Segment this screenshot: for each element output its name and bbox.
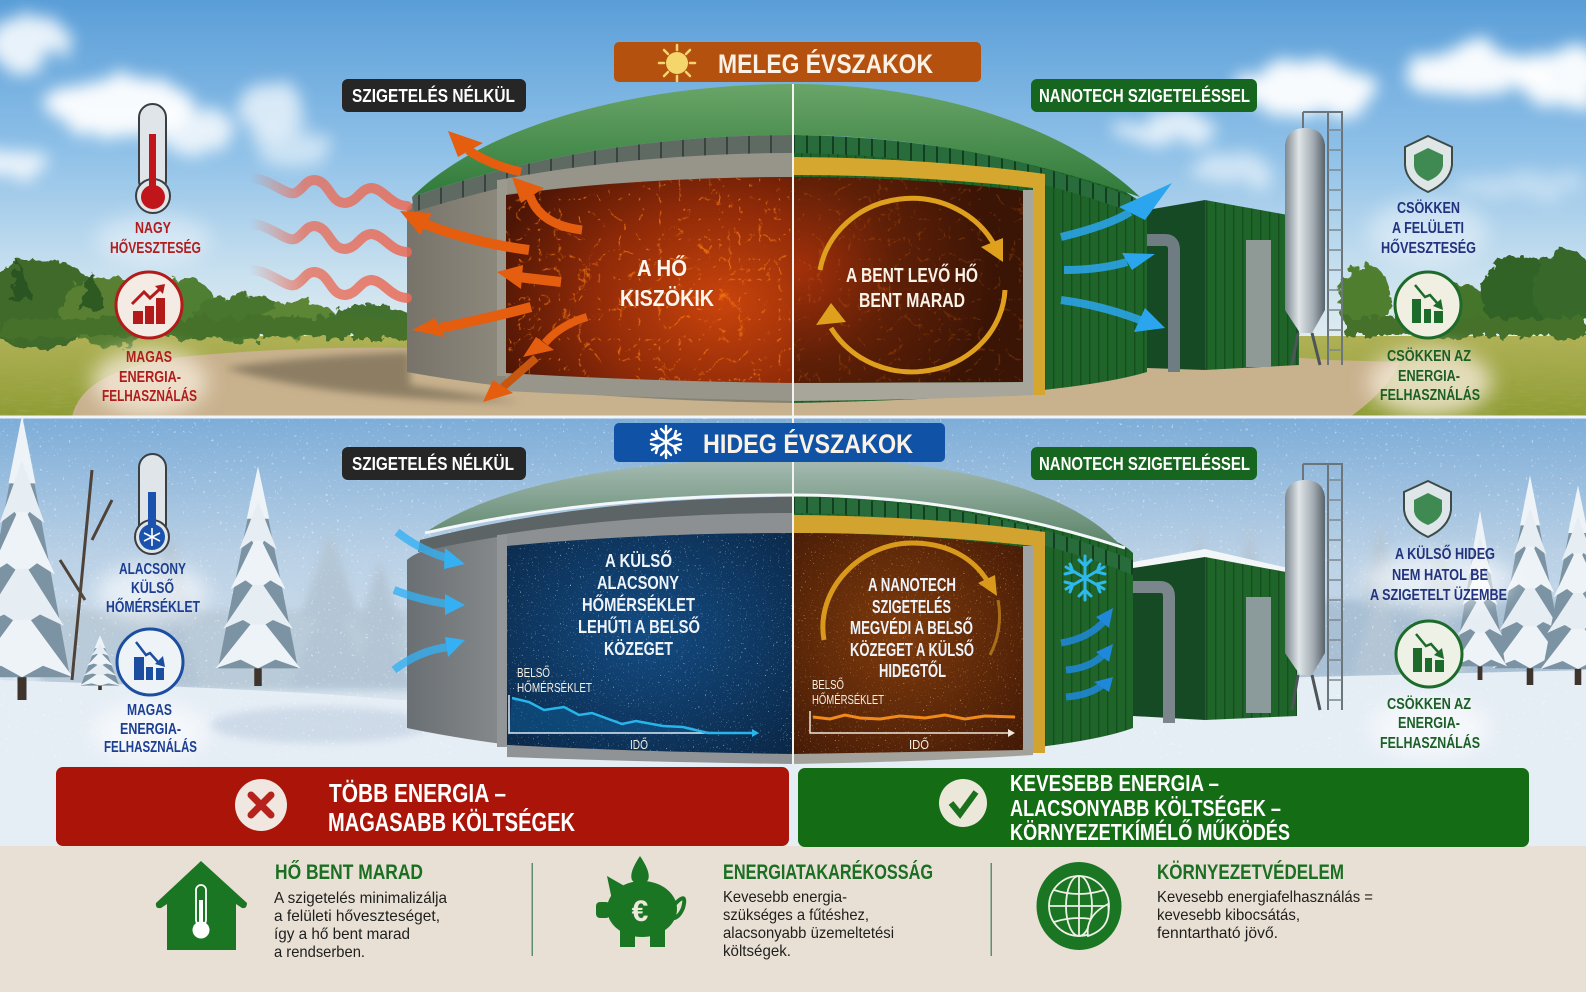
yellow insulation frame bbox=[793, 157, 1045, 395]
badge: without insulation summer bbox=[342, 79, 526, 112]
badge: nanotech summer bbox=[1031, 79, 1257, 112]
callout: more energy: TÖBB ENERGIA – bbox=[329, 778, 506, 808]
icon: thermometer cold bbox=[135, 454, 169, 554]
text: energy use reduced winter: ENERGIA- bbox=[1398, 715, 1460, 732]
text: energy saving: ENERGIATAKARÉKOSSÁG bbox=[723, 859, 933, 884]
callout: more energy bbox=[56, 767, 789, 846]
cutaway: retained heat right bbox=[793, 170, 1028, 390]
concrete bottom bbox=[506, 373, 793, 401]
concrete seam bbox=[497, 180, 507, 376]
icon: rising energy chart bbox=[116, 272, 182, 338]
text: surface heat loss reduced bbox=[1381, 198, 1476, 257]
text: heat escapes: A HŐ bbox=[637, 254, 687, 281]
text: heat stays inside bbox=[846, 264, 978, 312]
icon: shield bbox=[1405, 136, 1452, 192]
concrete wall uninsulated bbox=[407, 135, 793, 403]
text: energy use reduced winter bbox=[1380, 694, 1480, 752]
text: nanotech protects interior: HIDEGTŐL bbox=[879, 660, 946, 681]
green building winter bbox=[1133, 549, 1297, 723]
text: energy use reduced summer: CSÖKKEN AZ bbox=[1387, 346, 1471, 365]
text: low outside temperature cools interior bbox=[578, 550, 700, 659]
text: energy use reduced winter: CSÖKKEN AZ bbox=[1387, 694, 1471, 713]
text: heat stays in: HŐ BENT MARAD bbox=[275, 859, 423, 884]
badge: without insulation summer: SZIGETELÉS NÉLKÜL bbox=[352, 85, 515, 106]
winter sky bbox=[0, 418, 1586, 718]
badge: without insulation winter bbox=[342, 447, 526, 480]
heading: cold seasons: HIDEG ÉVSZAKOK bbox=[703, 428, 913, 459]
rim left bbox=[418, 497, 793, 552]
text: energy use reduced summer: FELHASZNÁLÁS bbox=[1380, 385, 1480, 404]
text: heat stays in: a rendserben. bbox=[274, 944, 365, 961]
text: heat stays inside: BENT MARAD bbox=[859, 290, 965, 312]
text: heat stays inside: A BENT LEVŐ HŐ bbox=[846, 264, 978, 287]
cutaway: hot interior left bbox=[500, 170, 795, 390]
pine trees left bbox=[0, 415, 300, 700]
text: heat stays in bbox=[274, 859, 447, 961]
heading: cold seasons bbox=[614, 423, 945, 462]
label glow left bbox=[92, 198, 1492, 416]
divider bbox=[990, 863, 992, 956]
snow on rim bbox=[425, 495, 1125, 548]
green building bbox=[1147, 200, 1299, 372]
text: low outside temperature cools interior: A KÜLSŐ bbox=[605, 550, 672, 571]
text: environmental protection: fenntartható jövő. bbox=[1157, 925, 1278, 942]
text: high energy use: ENERGIA- bbox=[119, 369, 181, 386]
text: surface heat loss reduced: A FELÜLETI bbox=[1392, 218, 1464, 237]
door bbox=[1246, 240, 1271, 367]
text: high energy use winter bbox=[104, 702, 197, 756]
callout: less energy: KÖRNYEZETKÍMÉLŐ MŰKÖDÉS bbox=[1010, 818, 1290, 845]
text: environmental protection: KÖRNYEZETVÉDELEM bbox=[1157, 859, 1344, 884]
text: high heat loss: NAGY bbox=[135, 220, 171, 237]
text: low outside temperature bbox=[106, 561, 200, 616]
text: cold does not reach plant: NEM HATOL BE bbox=[1392, 567, 1488, 584]
text: high heat loss: HŐVESZTESÉG bbox=[110, 238, 201, 257]
arc arrow: protected interior bbox=[823, 543, 1000, 655]
callout: less energy: ALACSONYABB KÖLTSÉGEK – bbox=[1010, 794, 1281, 821]
icon: falling energy chart green bbox=[1395, 272, 1461, 338]
grey strip bbox=[1023, 546, 1033, 751]
chart: falling internal temperature bbox=[509, 665, 759, 752]
ladder cage bbox=[1303, 112, 1342, 365]
bottom strip right bbox=[793, 382, 1033, 401]
text: energy saving: Kevesebb energia- bbox=[723, 889, 847, 906]
digester tank (winter) bbox=[407, 458, 1133, 764]
callout: more energy: MAGASABB KÖLTSÉGEK bbox=[328, 807, 575, 837]
pipe bbox=[1147, 240, 1174, 372]
text: nanotech protects interior: MEGVÉDI A BELSŐ bbox=[850, 617, 973, 638]
heading: warm seasons bbox=[614, 42, 981, 82]
text: heat stays in: A szigetelés minimalizálja bbox=[274, 890, 447, 907]
snowfall bbox=[0, 418, 1586, 758]
chart: falling internal temperature: BELSŐ bbox=[517, 665, 550, 680]
text: nanotech protects interior bbox=[850, 574, 974, 681]
text: low outside temperature cools interior: LEHŰTI A BELSŐ bbox=[578, 616, 700, 637]
text: high energy use winter: ENERGIA- bbox=[120, 721, 181, 738]
grass field bbox=[0, 336, 1586, 417]
yellow insulation frame bbox=[793, 515, 1045, 753]
text: cold does not reach plant: A KÜLSŐ HIDEG bbox=[1395, 544, 1495, 563]
dome rim right bbox=[793, 135, 1147, 218]
text: energy use reduced winter: FELHASZNÁLÁS bbox=[1380, 733, 1480, 752]
divider bbox=[532, 863, 533, 956]
dirt ground bbox=[72, 348, 1400, 417]
icon: check bbox=[939, 779, 987, 827]
text: cold does not reach plant: A SZIGETELT ÜZEMBE bbox=[1370, 585, 1507, 604]
panel: cold seasons scene bbox=[0, 415, 1586, 848]
arrows: cold entering bbox=[394, 532, 465, 670]
chart: stable internal temperature bbox=[810, 677, 1015, 752]
arrows: heat escaping bbox=[400, 131, 587, 402]
chart: falling internal temperature: IDŐ bbox=[630, 737, 648, 752]
text: heat escapes bbox=[620, 254, 714, 311]
concrete ring bbox=[498, 153, 793, 195]
text: high energy use: FELHASZNÁLÁS bbox=[102, 386, 197, 405]
text: environmental protection: kevesebb kibocsátás, bbox=[1157, 907, 1300, 924]
rim right bbox=[793, 497, 1133, 575]
badge: without insulation winter: SZIGETELÉS NÉLKÜL bbox=[352, 453, 514, 474]
text: high energy use bbox=[102, 351, 196, 401]
pipe bbox=[1133, 587, 1169, 723]
icon: piggy bank with euro bbox=[596, 856, 684, 947]
snow path shadow bbox=[210, 707, 430, 743]
text: surface heat loss reduced: CSÖKKEN bbox=[1397, 198, 1460, 217]
text: nanotech protects interior: KÖZEGET A KÜLSŐ bbox=[850, 639, 974, 660]
green cladding insulated wall bbox=[793, 495, 1133, 762]
badge: nanotech winter: NANOTECH SZIGETELÉSSEL bbox=[1039, 453, 1250, 474]
text: energy saving: szükséges a fűtéshez, bbox=[723, 907, 869, 924]
text: low outside temperature cools interior: KÖZEGET bbox=[604, 638, 674, 659]
callout: less energy bbox=[798, 768, 1529, 847]
icon: energy chart blue bbox=[117, 629, 183, 695]
pine trees right bbox=[1453, 475, 1586, 685]
text: low outside temperature cools interior: HŐMÉRSÉKLET bbox=[582, 594, 696, 615]
text: low outside temperature: HŐMÉRSÉKLET bbox=[106, 597, 200, 616]
center split line bbox=[792, 84, 794, 764]
text: high energy use winter: FELHASZNÁLÁS bbox=[104, 737, 197, 756]
text: environmental protection: Kevesebb energiafelhasználás = bbox=[1157, 889, 1373, 906]
heat waves bbox=[250, 178, 407, 298]
chart: falling internal temperature: HŐMÉRSÉKLET bbox=[517, 680, 592, 695]
callout: less energy: KEVESEBB ENERGIA – bbox=[1010, 770, 1219, 796]
concrete wall uninsulated bbox=[407, 495, 793, 762]
tree line left bbox=[0, 260, 418, 350]
icon: piggy bank with euro: € bbox=[632, 895, 649, 928]
chart: stable internal temperature: HŐMÉRSÉKLET bbox=[812, 692, 884, 707]
text: high energy use winter: MAGAS bbox=[127, 702, 172, 719]
door bbox=[1246, 597, 1271, 713]
snow ground bbox=[0, 670, 1586, 848]
text: heat stays in: így a hő bent marad bbox=[274, 926, 410, 943]
clouds bbox=[0, 14, 1586, 199]
text: nanotech protects interior: A NANOTECH bbox=[868, 574, 956, 595]
text: energy saving: költségek. bbox=[723, 943, 791, 960]
dome rim left bbox=[412, 135, 793, 212]
snow roof bbox=[1133, 549, 1297, 574]
text: environmental protection bbox=[1157, 859, 1373, 942]
text: heat escapes: KISZÖKIK bbox=[620, 285, 714, 311]
circular arrows: heat retained bbox=[816, 198, 1005, 372]
dome bbox=[412, 84, 1140, 197]
arrows: cold blocked by insulation bbox=[1061, 608, 1113, 697]
text: cold does not reach plant bbox=[1370, 544, 1507, 604]
label glow winter bbox=[92, 552, 1514, 762]
bottom strip bbox=[793, 748, 1033, 764]
icon: snowflake on wall bbox=[1065, 556, 1105, 600]
ladder cage bbox=[1303, 464, 1342, 710]
badge: nanotech summer: NANOTECH SZIGETELÉSSEL bbox=[1039, 85, 1250, 106]
text: surface heat loss reduced: HŐVESZTESÉG bbox=[1381, 238, 1476, 257]
text: low outside temperature: ALACSONY bbox=[119, 561, 186, 578]
icon: shield winter bbox=[1404, 481, 1451, 537]
digester tank (summer) bbox=[407, 84, 1147, 403]
chart: stable internal temperature: BELSŐ bbox=[812, 677, 844, 692]
tree line right bbox=[1339, 250, 1586, 338]
text: nanotech protects interior: SZIGETELÉS bbox=[872, 596, 951, 617]
cutaway: protected warm interior bbox=[793, 530, 1028, 760]
distant misty forest bbox=[40, 520, 1586, 690]
text: high heat loss bbox=[110, 222, 200, 253]
icon: falling energy chart green winter bbox=[1396, 621, 1462, 687]
icon: snowflake bbox=[651, 426, 681, 458]
text: low outside temperature: KÜLSŐ bbox=[131, 578, 174, 597]
icon: sun bbox=[659, 45, 695, 81]
text: energy saving bbox=[723, 859, 933, 960]
text: energy saving: alacsonyabb üzemeltetési bbox=[723, 925, 894, 942]
silo bbox=[1285, 112, 1342, 365]
concrete bottom bbox=[507, 745, 793, 764]
grey inner strip bbox=[1023, 190, 1033, 384]
green cladding insulated wall bbox=[793, 135, 1147, 403]
icon: globe with leaf bbox=[1036, 862, 1122, 950]
icon: house with thermometer bbox=[156, 861, 247, 950]
silo winter bbox=[1285, 464, 1342, 710]
sky bbox=[0, 0, 1586, 340]
text: heat stays in: a felületi hőveszteséget, bbox=[274, 908, 440, 925]
panel: warm seasons scene bbox=[0, 0, 1586, 417]
concrete ring bbox=[498, 513, 793, 548]
cutaway: cold interior bbox=[500, 530, 795, 760]
concrete seam bbox=[497, 535, 507, 747]
tank shadow bbox=[225, 352, 520, 402]
text: high energy use: MAGAS bbox=[126, 349, 172, 366]
arrows: reduced heat loss bbox=[1061, 183, 1172, 332]
panel: bottom information strip bbox=[0, 846, 1586, 992]
section divider bbox=[0, 416, 1586, 418]
text: low outside temperature cools interior: ALACSONY bbox=[597, 572, 680, 593]
icon: cross bbox=[235, 779, 287, 831]
text: energy use reduced summer bbox=[1380, 346, 1480, 404]
chart: stable internal temperature: IDŐ bbox=[909, 737, 929, 752]
frosted dome bbox=[425, 458, 1120, 545]
icon: thermometer hot bbox=[136, 104, 170, 213]
heading: warm seasons: MELEG ÉVSZAKOK bbox=[718, 48, 933, 79]
text: energy use reduced summer: ENERGIA- bbox=[1398, 368, 1460, 385]
badge: nanotech winter bbox=[1031, 447, 1257, 480]
